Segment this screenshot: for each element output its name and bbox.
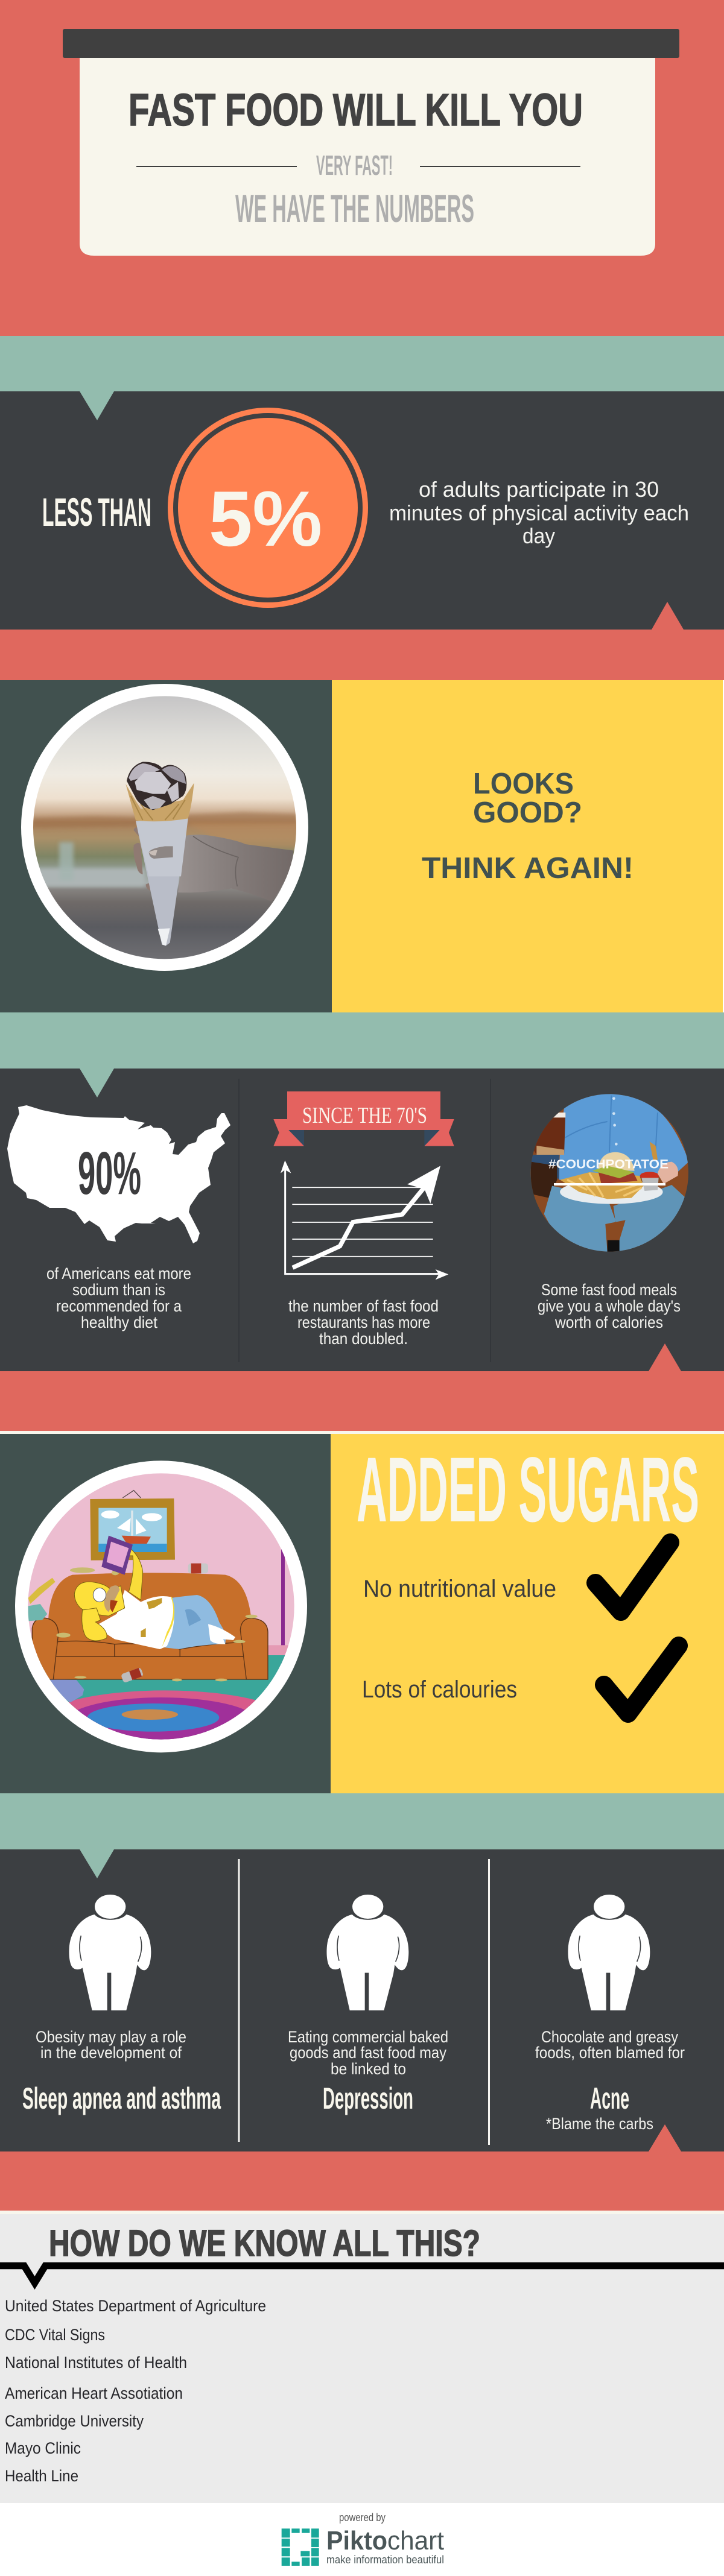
ribbon: since the 70s: SINCE THE 70'S <box>302 1103 427 1128</box>
icon: piktochart logo <box>282 2528 319 2566</box>
band: red divider <box>0 630 724 680</box>
panel: five percent statistic <box>0 336 724 630</box>
pointer: red triangle <box>649 2124 681 2151</box>
title: FAST FOOD WILL KILL YOU <box>129 84 583 135</box>
row: no nutritional value <box>363 1542 670 1612</box>
burger <box>599 1152 635 1171</box>
text: looks good <box>473 768 582 829</box>
picture frame <box>122 1491 141 1498</box>
sleeve dark <box>531 1155 559 1179</box>
icon: obese figure 2 <box>326 1895 408 2010</box>
footer: piktochart credit <box>282 2511 444 2566</box>
text: looks good: LOOKS <box>473 768 574 800</box>
pointer: teal triangle <box>80 1849 114 1878</box>
text: sodium <box>46 1264 191 1331</box>
column: acne: *Blame the carbs <box>546 2115 653 2133</box>
header bar <box>63 29 679 58</box>
text: sodium: of Americans eat more <box>46 1264 191 1283</box>
list: sources: Health Line <box>5 2467 78 2485</box>
list: sources: Cambridge University <box>5 2412 144 2430</box>
column: sleep apnea: in the development of <box>40 2044 182 2062</box>
column: depression <box>288 2028 448 2115</box>
text: adults activity: day <box>522 523 555 548</box>
pointer: red triangle <box>649 1343 681 1371</box>
text: adults activity: minutes of physical activity each <box>389 500 689 525</box>
panel: sources <box>0 2211 724 2503</box>
ketchup and hand <box>640 1172 659 1178</box>
snack bag <box>101 1536 133 1575</box>
icon: check mark <box>595 1542 670 1612</box>
wordmark: piktochart: Pikto <box>326 2526 387 2555</box>
photo: couch potato <box>529 1091 690 1254</box>
text: restaurants: restaurants has more <box>297 1313 430 1331</box>
wordmark: piktochart: make information beautiful <box>326 2554 444 2566</box>
text: adults activity <box>389 477 689 548</box>
cans <box>188 1564 208 1573</box>
wafer <box>125 783 194 821</box>
text: powered by: powered by <box>339 2511 386 2524</box>
list: sources: Mayo Clinic <box>5 2439 81 2457</box>
photo: ice cream cone <box>21 684 308 971</box>
wordmark: piktochart: chart <box>387 2526 444 2555</box>
pointer: teal triangle <box>80 1069 114 1097</box>
panel: looks good <box>0 680 723 1012</box>
photo caption: couchpotatoe <box>548 1158 668 1185</box>
icon: check mark <box>604 1646 679 1714</box>
arm and hand <box>178 835 293 896</box>
title card <box>80 58 655 256</box>
wordmark: piktochart <box>326 2526 444 2566</box>
panel: five percent statistic: LESS THAN <box>42 490 151 534</box>
shirt <box>559 1093 689 1180</box>
column: acne: foods, often blamed for <box>535 2044 685 2062</box>
text: restaurants <box>288 1297 439 1348</box>
text: calories: worth of calories <box>554 1313 663 1331</box>
column: acne: Acne <box>590 2082 629 2115</box>
column: acne: Chocolate and greasy <box>541 2028 678 2046</box>
text: calories: give you a whole day's <box>538 1297 681 1315</box>
phone and stand <box>28 1604 47 1621</box>
text: think again: THINK AGAIN! <box>422 852 634 885</box>
jeans <box>544 1186 615 1253</box>
panel: header band: WE HAVE THE NUMBERS <box>235 186 474 230</box>
head <box>74 1582 125 1616</box>
list: sources: American Heart Assotiation <box>5 2384 183 2402</box>
legs <box>162 1595 226 1649</box>
map: united states <box>7 1105 230 1243</box>
text: adults activity: of adults participate in 30 <box>419 477 659 502</box>
paper cone <box>136 818 188 945</box>
plate <box>560 1180 663 1204</box>
badge: 5 percent <box>168 408 368 608</box>
row: no nutritional value: No nutritional value <box>363 1576 556 1602</box>
torso <box>98 1590 174 1649</box>
text: restaurants: the number of fast food <box>288 1297 439 1315</box>
column: depression: Eating commercial baked <box>288 2028 448 2046</box>
column: depression: Depression <box>323 2082 413 2115</box>
panel: three facts <box>0 1012 724 1371</box>
head arm <box>82 1608 107 1641</box>
column: sleep apnea: Obesity may play a role <box>36 2028 186 2046</box>
text: sodium: sodium than is <box>72 1281 165 1299</box>
subtitle: very fast: VERY FAST! <box>316 150 393 181</box>
panel: added sugars <box>0 1431 724 1793</box>
pointer: teal triangle <box>80 391 114 420</box>
text: looks good: GOOD? <box>473 797 582 829</box>
text: calories: Some fast food meals <box>541 1281 677 1299</box>
stat: 90 percent: 90% <box>78 1140 141 1207</box>
list: sources <box>5 2297 266 2485</box>
text: calories <box>538 1281 681 1331</box>
photo caption: couchpotatoe: #COUCHPOTATOE <box>548 1158 668 1171</box>
speech rule with notch <box>0 2266 724 2283</box>
ribbon: since the 70s <box>273 1091 454 1146</box>
list: sources: National Institutes of Health <box>5 2353 187 2372</box>
arm <box>128 1549 144 1600</box>
panel: health effects <box>0 1793 724 2151</box>
console <box>50 1679 84 1702</box>
text: restaurants: than doubled. <box>319 1330 408 1348</box>
icon: obese figure 3 <box>568 1895 650 2010</box>
crumbs <box>56 1567 258 1681</box>
column: acne <box>535 2028 685 2133</box>
list: sources: United States Department of Agriculture <box>5 2297 266 2315</box>
ice cream scoops <box>127 762 186 810</box>
beer <box>531 1113 565 1155</box>
icon: obese figure 1 <box>69 1895 151 2010</box>
band: red divider <box>0 2151 724 2211</box>
chart: rising line <box>281 1160 448 1280</box>
band: red divider <box>0 1371 724 1431</box>
column: depression: be linked to <box>331 2060 406 2078</box>
illustration: couch scene <box>15 1460 307 1757</box>
column: sleep apnea <box>22 2028 221 2115</box>
fingers <box>133 827 143 874</box>
row: lots of calouries: Lots of calouries <box>362 1676 517 1703</box>
list: sources: CDC Vital Signs <box>5 2326 105 2344</box>
text: sodium: healthy diet <box>81 1313 157 1331</box>
text: sodium: recommended for a <box>56 1297 182 1315</box>
heading: how do we know: HOW DO WE KNOW ALL THIS? <box>49 2223 480 2264</box>
pointer: red triangle <box>652 602 684 630</box>
floor and rug <box>37 1655 285 1740</box>
row: lots of calouries <box>362 1646 679 1714</box>
badge: 5 percent: 5% <box>209 475 322 563</box>
panel: header band <box>0 0 724 336</box>
couch <box>48 1573 252 1654</box>
column: sleep apnea: Sleep apnea and asthma <box>22 2082 221 2115</box>
fries <box>560 1172 644 1199</box>
column: depression: goods and fast food may <box>290 2044 446 2062</box>
